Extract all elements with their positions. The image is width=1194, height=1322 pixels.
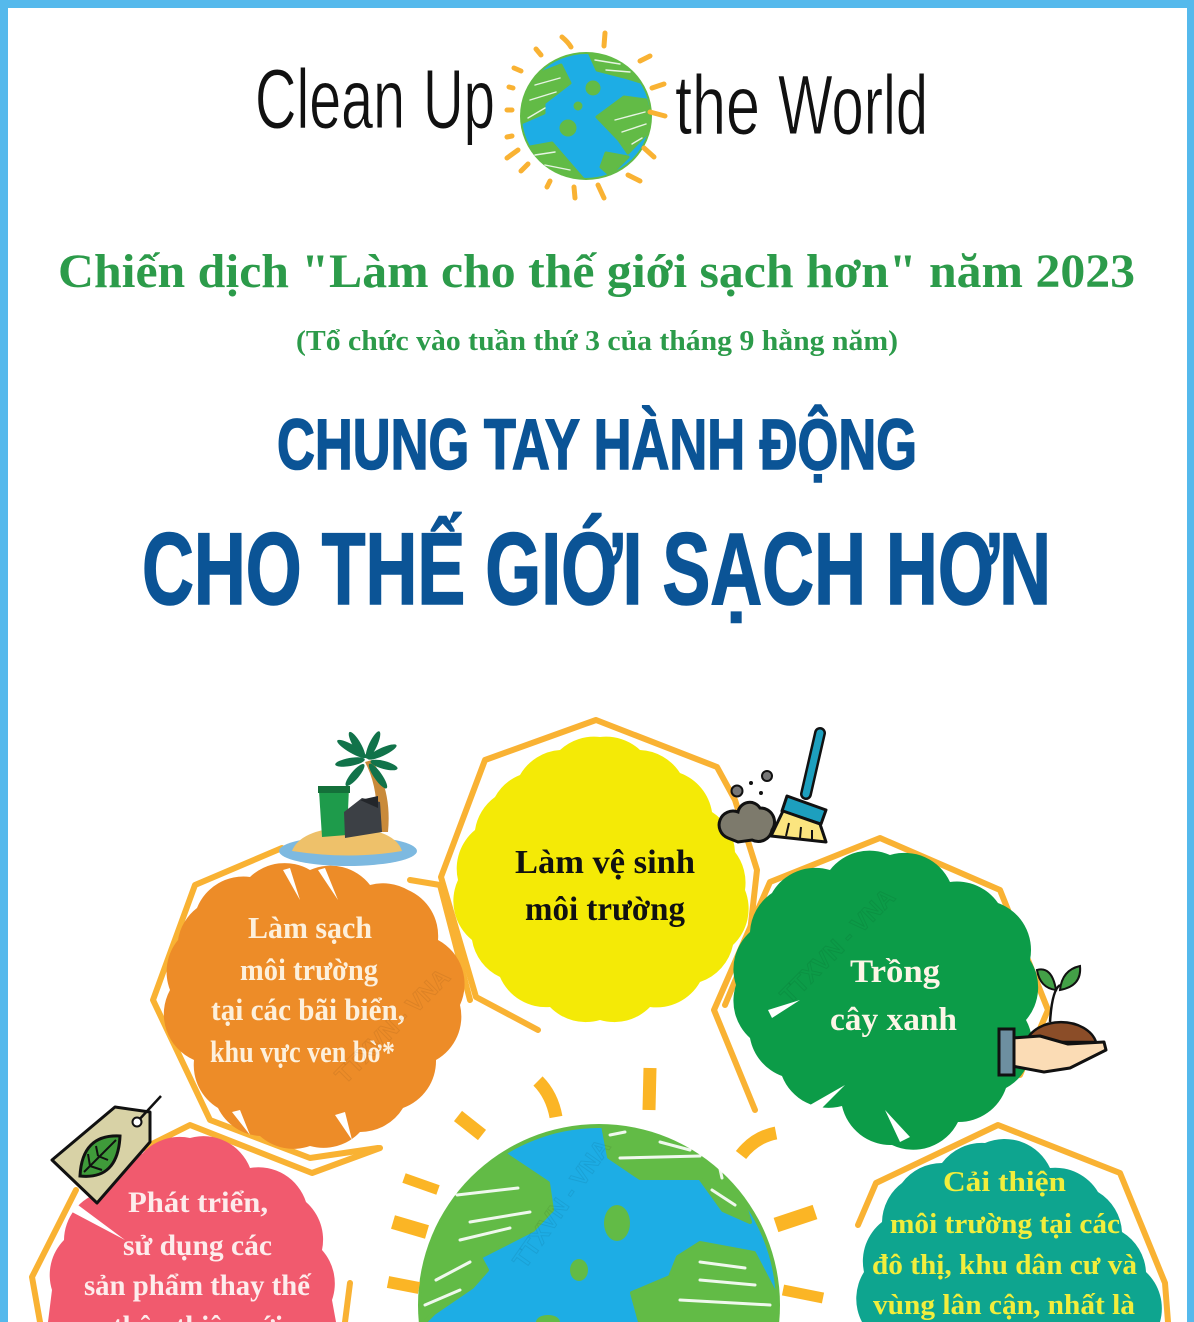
orange text: khu vực ven bờ* bbox=[210, 1034, 395, 1069]
teal text: Cải thiện bbox=[943, 1166, 1066, 1198]
campaign subtitle: (Tổ chức vào tuần thứ 3 của tháng 9 hằng năm) bbox=[296, 325, 898, 357]
orange text: tại các bãi biển, bbox=[211, 992, 405, 1027]
teal text bbox=[872, 1166, 1138, 1321]
campaign title: Chiến dịch "Làm cho thế giới sạch hơn" năm 2023 bbox=[58, 245, 1135, 298]
panel: plant trees (green) bbox=[714, 838, 1048, 1150]
pink streak bbox=[72, 1205, 125, 1240]
watermarks: TTXVN - VNA bbox=[508, 1135, 616, 1273]
logo word Up: Up bbox=[423, 52, 495, 146]
green outline bbox=[714, 838, 1048, 1110]
orange text bbox=[210, 910, 405, 1069]
pink text bbox=[84, 1186, 312, 1322]
panel: improve urban environment (teal) bbox=[856, 1125, 1168, 1322]
globe sketch highlights bbox=[425, 1132, 770, 1305]
orange text: Làm sạch bbox=[248, 910, 372, 945]
teal text: môi trường tại các bbox=[890, 1208, 1120, 1240]
green blob bbox=[733, 851, 1038, 1150]
palm fronds bbox=[335, 730, 399, 791]
yellow outline bbox=[441, 720, 757, 1030]
icon: hand holding seedling bbox=[999, 966, 1106, 1075]
yellow text: môi trường bbox=[525, 891, 685, 928]
yellow text: Làm vệ sinh bbox=[515, 844, 695, 881]
orange text: môi trường bbox=[240, 952, 378, 987]
logo word Clean: Clean bbox=[255, 52, 405, 146]
teal text: đô thị, khu dân cư và bbox=[872, 1249, 1138, 1281]
watermarks: TTXVN - VNA bbox=[330, 964, 456, 1089]
green text bbox=[830, 954, 957, 1038]
orange blob bbox=[164, 863, 465, 1149]
logo word World: World bbox=[778, 58, 928, 152]
top continent bbox=[602, 1120, 750, 1222]
globe islands bbox=[536, 1205, 630, 1322]
watermarks bbox=[330, 884, 901, 1273]
watermarks: TTXVN - VNA bbox=[775, 884, 901, 1009]
green text: Trồng bbox=[850, 954, 941, 990]
logo: Clean Up the World bbox=[255, 33, 928, 198]
teal text: vùng lân cận, nhất là bbox=[873, 1289, 1135, 1321]
yellow text bbox=[515, 844, 695, 928]
central globe bbox=[405, 1120, 790, 1322]
pink text: sử dụng các bbox=[123, 1229, 272, 1262]
panel: eco-friendly products (pink) bbox=[32, 1125, 380, 1322]
teal outline bbox=[858, 1125, 1168, 1322]
logo globe bbox=[516, 50, 653, 180]
heading line 1: CHUNG TAY HÀNH ĐỘNG bbox=[277, 405, 917, 485]
yellow blob bbox=[453, 737, 749, 1022]
orange streaks bbox=[232, 868, 352, 1140]
logo word the: the bbox=[675, 58, 760, 152]
icon: island with palm and trash bbox=[279, 730, 417, 866]
central globe sun rays bbox=[388, 1068, 823, 1298]
right continent bbox=[632, 1243, 790, 1322]
pink blob bbox=[48, 1136, 336, 1322]
teal blob bbox=[856, 1139, 1162, 1322]
orange outline bbox=[153, 848, 470, 1158]
green streaks bbox=[768, 1000, 910, 1142]
left continent bbox=[422, 1154, 554, 1322]
pink text: Phát triển, bbox=[128, 1186, 268, 1219]
pink text: sản phẩm thay thế bbox=[84, 1269, 312, 1302]
icon: broom and dirt bbox=[719, 733, 826, 842]
icon: eco leaf tag bbox=[52, 1096, 161, 1203]
green text: cây xanh bbox=[830, 1002, 957, 1038]
logo sun rays bbox=[507, 33, 665, 198]
panel: clean beaches (orange) bbox=[153, 848, 470, 1158]
pink outline bbox=[32, 1125, 380, 1322]
panel: clean the environment (yellow) bbox=[441, 720, 757, 1030]
